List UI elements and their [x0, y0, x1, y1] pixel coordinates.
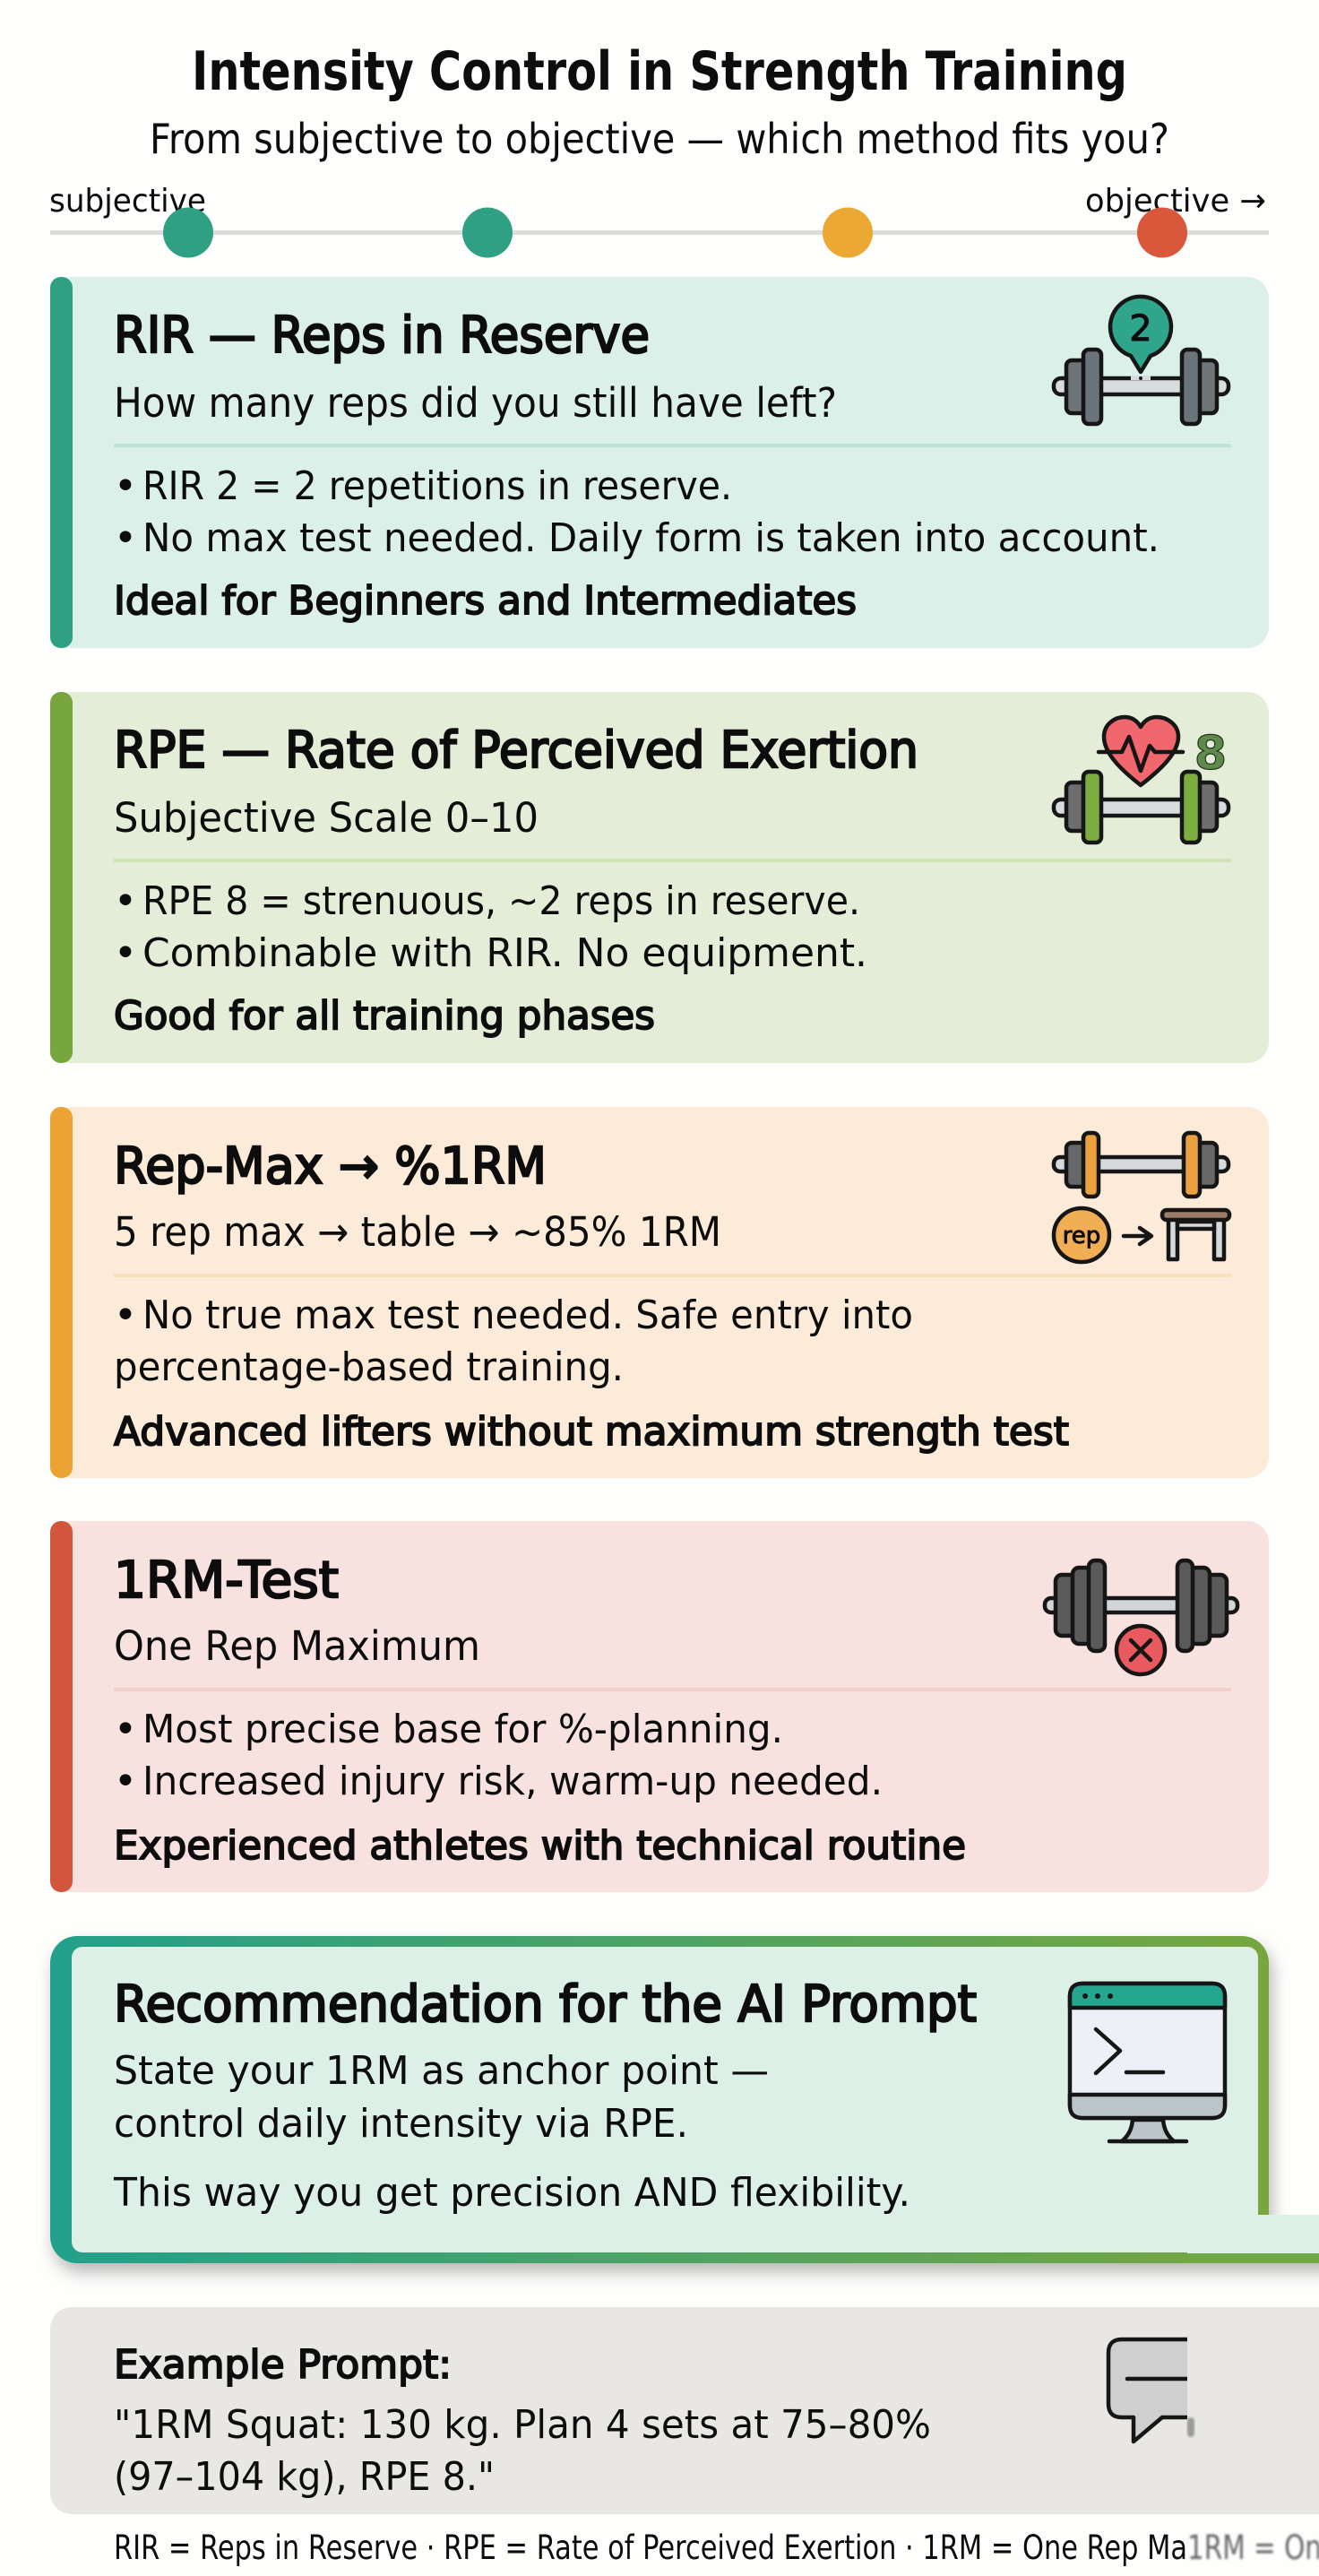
bullet: Rep-Max advantages: No true max test needed. Safe entry into: [142, 1292, 913, 1338]
subheading: RIR: How many reps did you still have left?: [114, 379, 837, 427]
heading: Rep-Max: Rep-Max → %1RM: [114, 1137, 547, 1196]
bullet continuation: percentage-based training.: [114, 1344, 624, 1390]
icon: terminal monitor: [1070, 1984, 1225, 2141]
audience: RPE: Good for all training phases: [114, 993, 655, 1039]
icon: chat bubble: [1106, 2338, 1187, 2443]
icon: barbell with RIR 2 bubble: 2: [1129, 308, 1152, 350]
icon: heavy barbell with X: [1045, 1560, 1237, 1674]
body: example line two: (97–104 kg), RPE 8.": [114, 2454, 495, 2500]
bullet: RIR definition: •: [114, 463, 137, 509]
bullet: RIR advantages: •: [114, 515, 137, 561]
panel: RIR: [50, 277, 1269, 648]
bullet: 1RM precision: •: [114, 1707, 137, 1752]
subheading: 1RM-Test: One Rep Maximum: [114, 1622, 480, 1670]
panel: RPE: [50, 692, 1269, 1063]
body: anchor point line: State your 1RM as anchor point —: [114, 2048, 769, 2094]
scale marker: Rep-Max: [823, 208, 873, 258]
bullet: 1RM risk: Increased injury risk, warm-up needed.: [142, 1759, 883, 1804]
panel: example prompt: [50, 2307, 1319, 2514]
bullet: 1RM precision: Most precise base for %-planning.: [142, 1707, 783, 1752]
subheading: RPE: Subjective Scale 0–10: [114, 794, 539, 842]
body: example line one: "1RM Squat: 130 kg. Plan 4 sets at 75–80%: [114, 2402, 931, 2448]
scale label: objective: objective →: [1085, 183, 1266, 220]
icon: barbell with RIR 2 bubble: [1054, 297, 1228, 424]
bullet: 1RM risk: •: [114, 1759, 137, 1804]
scale marker: RIR: [163, 208, 213, 258]
bullet: RPE definition: RPE 8 = strenuous, ~2 reps in reserve.: [142, 878, 860, 924]
heading: recommendation: Recommendation for the AI Prompt: [114, 1975, 977, 2034]
bullet: RIR definition: RIR 2 = 2 repetitions in reserve.: [142, 463, 732, 509]
bullet: RIR advantages: No max test needed. Daily form is taken into account.: [142, 515, 1160, 561]
bullet: Rep-Max advantages: •: [114, 1292, 137, 1338]
heading: example prompt: Example Prompt:: [114, 2342, 452, 2388]
heading: RIR: RIR — Reps in Reserve: [114, 307, 650, 365]
scale: subjective to objective: [49, 183, 1269, 258]
panel: recommendation: [50, 1936, 1269, 2263]
bullet: RPE definition: •: [114, 878, 137, 924]
audience: Rep-Max: Advanced lifters without maximum strength test: [114, 1409, 1069, 1455]
patch: recommendation panel edge artifact: [1187, 2215, 1319, 2282]
bullet: RPE advantages: Combinable with RIR. No equipment.: [142, 930, 867, 976]
audience: RIR: Ideal for Beginners and Intermediates: [114, 578, 857, 624]
icon: barbell with rep to table: [1054, 1133, 1229, 1262]
panel: 1RM-Test: [50, 1521, 1269, 1892]
panel: Rep-Max: [50, 1107, 1269, 1478]
scale marker: RPE: [462, 208, 513, 258]
bullet: RPE advantages: •: [114, 930, 137, 976]
body: daily intensity line: control daily intensity via RPE.: [114, 2101, 688, 2147]
heading: 1RM-Test: 1RM-Test: [114, 1552, 339, 1610]
icon: barbell with rep to table: rep: [1063, 1223, 1100, 1249]
icon: barbell with heart and RPE 8: 8: [1194, 727, 1227, 781]
subheading: Rep-Max: 5 rep max → table → ~85% 1RM: [114, 1208, 721, 1256]
icon: barbell with heart and RPE 8: [1054, 717, 1228, 843]
title: Intensity Control in Strength Training: [192, 40, 1127, 103]
subtitle: From subjective to objective — which method fits you?: [150, 115, 1169, 163]
audience: 1RM-Test: Experienced athletes with technical routine: [114, 1823, 966, 1869]
body: conclusion: This way you get precision AND flexibility.: [113, 2170, 910, 2216]
scale label: subjective: subjective: [49, 183, 206, 220]
scale marker: 1RM: [1137, 208, 1187, 258]
heading: RPE: RPE — Rate of Perceived Exertion: [114, 722, 918, 780]
